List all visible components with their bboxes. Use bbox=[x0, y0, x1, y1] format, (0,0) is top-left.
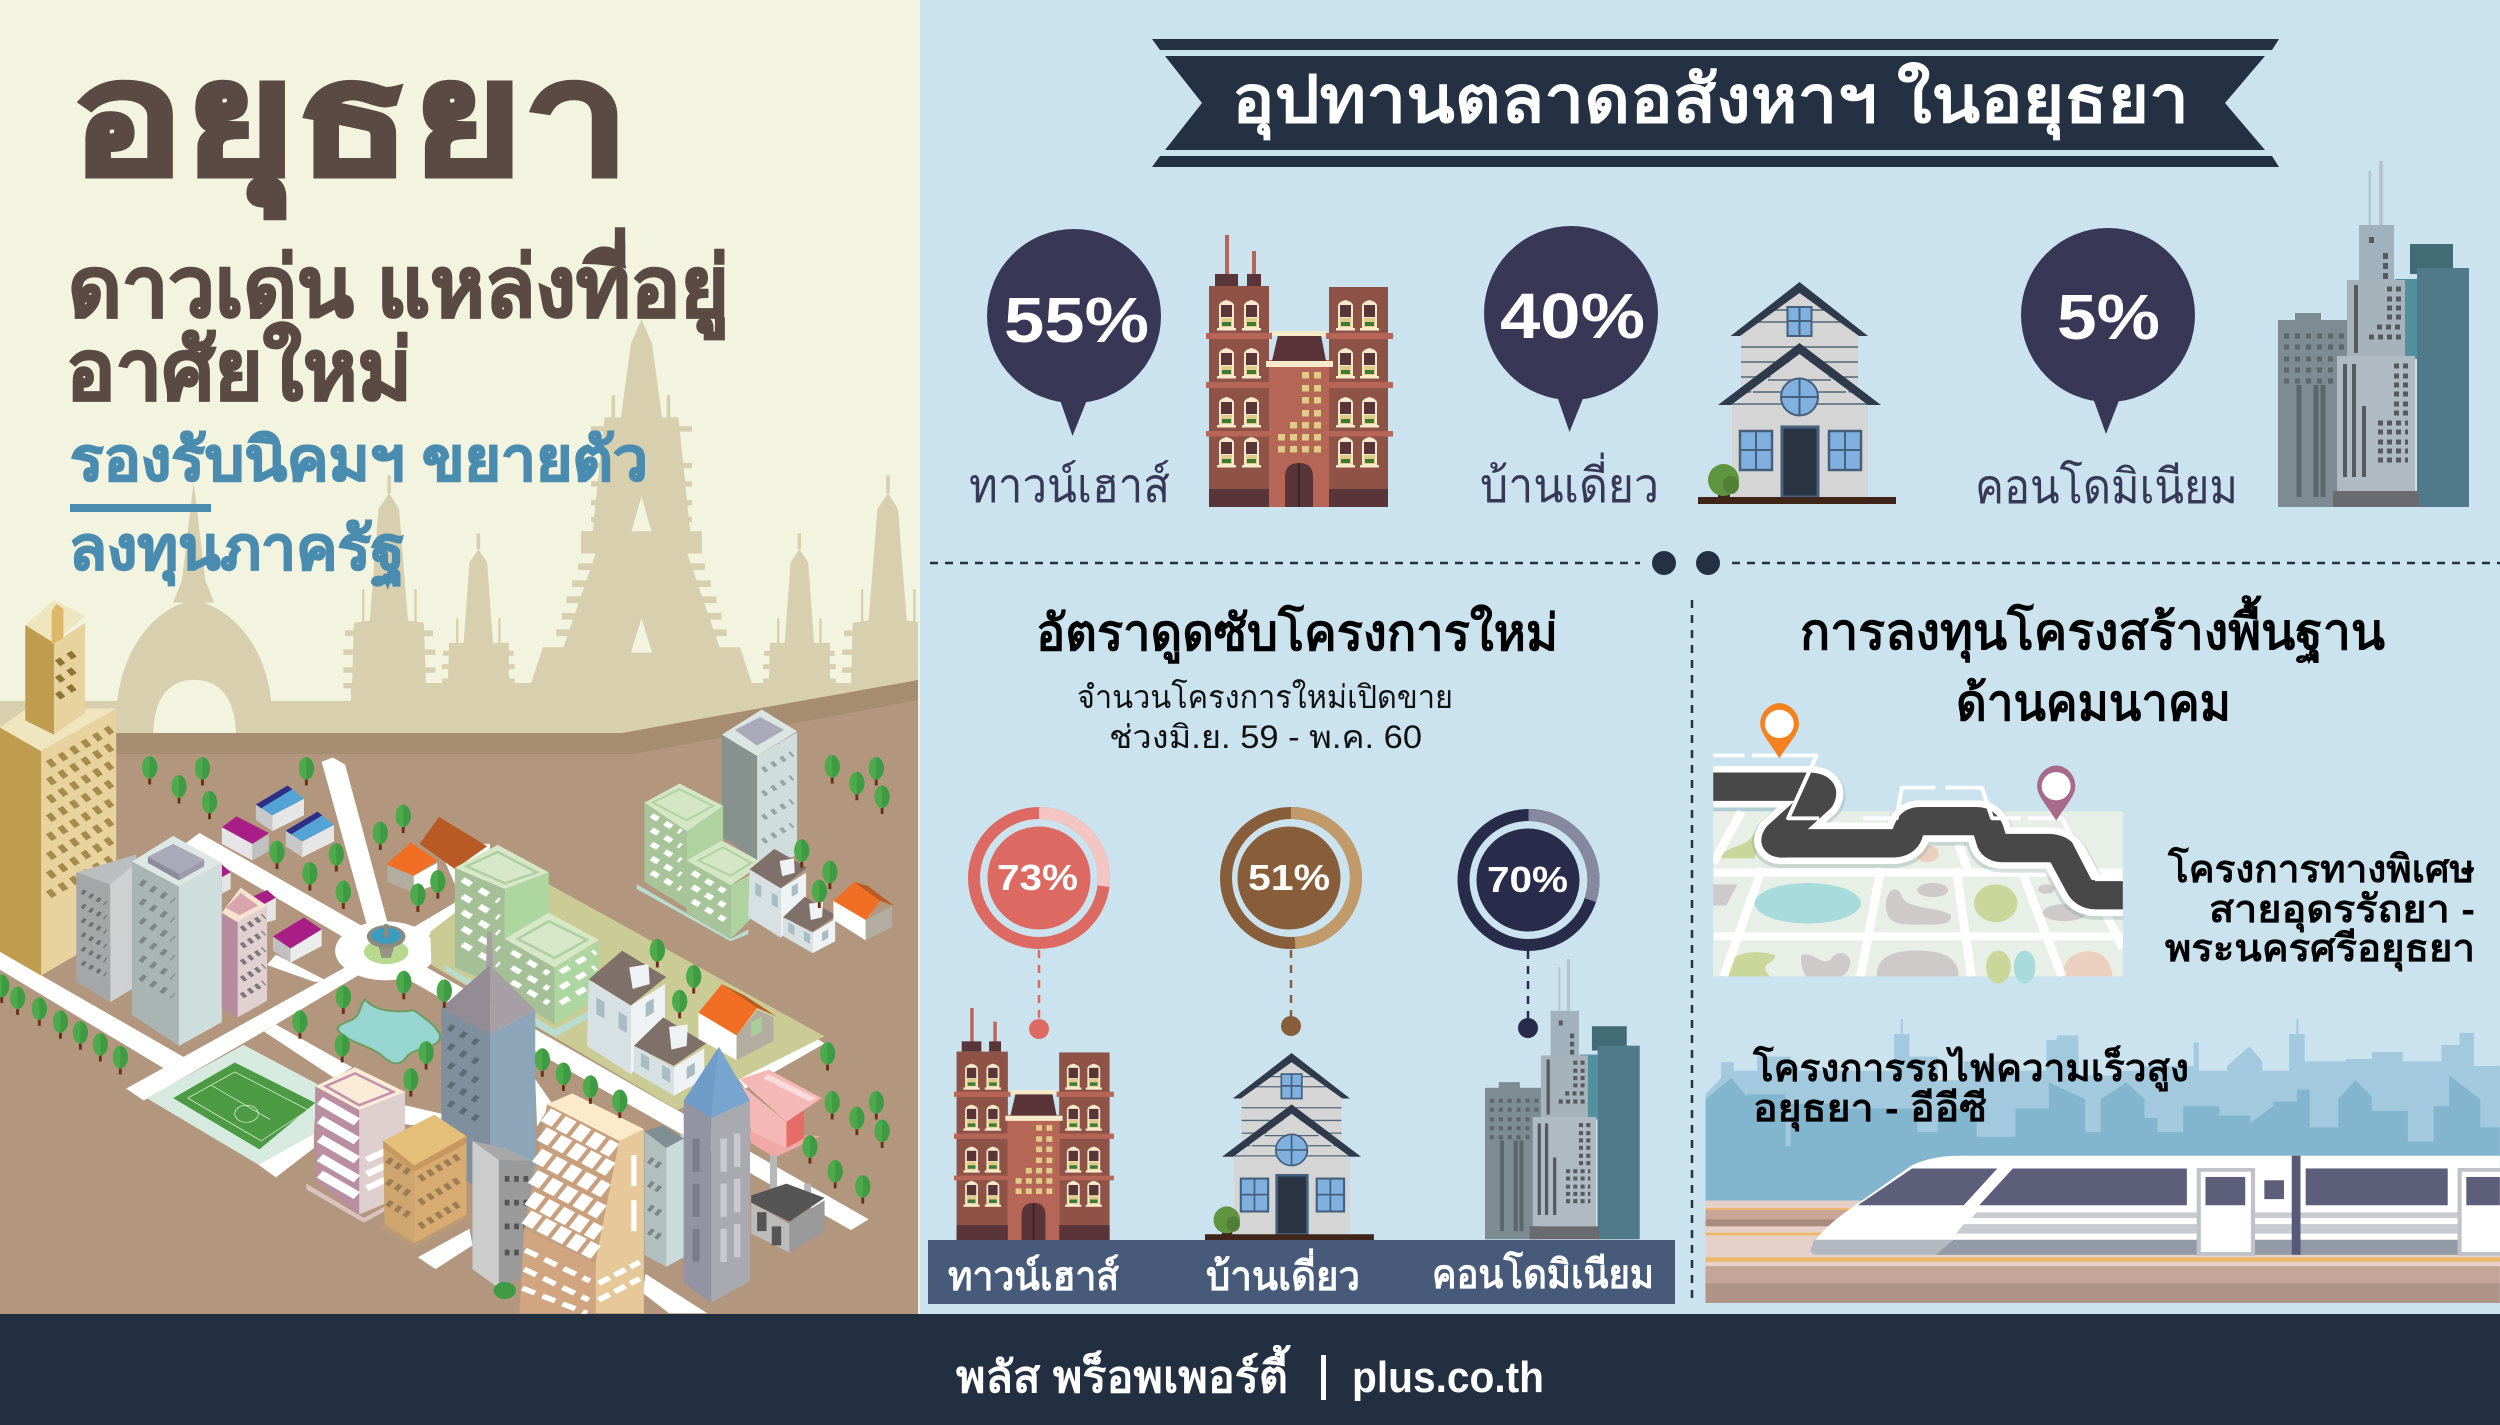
label: ทาวน์เฮาส์ bbox=[969, 460, 1170, 513]
pink apartment bbox=[306, 1067, 405, 1223]
horizontal divider with dots bbox=[930, 551, 2500, 575]
label: บ้านเดี่ยว bbox=[1480, 452, 1659, 513]
title: Ayutthaya: อยุธยา bbox=[70, 29, 630, 219]
fountain bbox=[364, 924, 408, 964]
grey tower bbox=[76, 854, 136, 1002]
city skyline back bbox=[1706, 1018, 2500, 1146]
stat: single house 40%: 40% bbox=[1500, 280, 1645, 352]
sub text bbox=[1077, 679, 1453, 755]
donut: 51% bbox=[1226, 813, 1356, 1036]
slim teal tower bbox=[644, 1125, 684, 1267]
donut: 70% bbox=[1464, 815, 1594, 1038]
text: motorway project: โครงการทางพิเศษ bbox=[2167, 846, 2475, 891]
temple skyline silhouette bbox=[0, 319, 934, 741]
category bar bbox=[928, 1240, 1675, 1304]
tagline: public investment: ลงทุนภาครัฐ bbox=[69, 515, 405, 587]
vertical divider bbox=[1691, 600, 1693, 1305]
yellow tower bbox=[0, 600, 116, 976]
pale tower bbox=[132, 836, 222, 1046]
green tower behind, right block bbox=[637, 709, 797, 941]
sub text: ช่วงมิ.ย. 59 - พ.ค. 60 bbox=[1109, 719, 1422, 755]
donut: 70%: 70% bbox=[1487, 859, 1568, 900]
sub text: จำนวนโครงการใหม่เปิดขาย bbox=[1077, 679, 1453, 715]
stat: townhouse 55% bbox=[969, 229, 1170, 513]
banner title: อุปทานตลาดอสังหาฯ ในอยุธยา bbox=[1232, 60, 2189, 141]
subtitle line 1: ดาวเด่น แหล่งที่อยู่ bbox=[68, 228, 729, 340]
houses, top right bbox=[748, 849, 836, 953]
green blocks center bbox=[445, 845, 599, 1037]
text: motorway project: สายอุดรรัถยา - bbox=[2209, 889, 2475, 933]
text: motorway project: พระนครศรีอยุธยา bbox=[2165, 928, 2475, 972]
donut: 73%: 73% bbox=[997, 857, 1078, 898]
train bbox=[1810, 1156, 2500, 1255]
panel: left background bbox=[0, 0, 920, 1425]
glass tower bbox=[519, 1093, 644, 1313]
stat: condominium 5% bbox=[1975, 228, 2238, 514]
heading: absorption rate: อัตราดูดซับโครงการใหม่ bbox=[1036, 603, 1558, 664]
ground layers bbox=[1705, 1201, 2500, 1303]
footer: พลัส พร็อพเพอร์ตี้ bbox=[956, 1344, 1292, 1402]
label: คอนโดมิเนียม bbox=[1975, 459, 2238, 514]
text: high-speed rail project: อยุธยา - อีอีซี bbox=[1753, 1088, 1987, 1132]
stat: condominium 5%: 5% bbox=[2057, 281, 2160, 353]
text: high-speed rail project: โครงการรถไฟความเร็วสูง bbox=[1752, 1045, 2189, 1092]
small roof houses bbox=[222, 785, 334, 963]
roads bbox=[0, 757, 869, 1313]
isometric city ground bbox=[0, 680, 918, 1314]
purple tower with blue spire bbox=[684, 1047, 750, 1302]
icon: townhouse bbox=[1206, 235, 1393, 507]
factory bbox=[751, 1155, 825, 1252]
trees bbox=[0, 755, 890, 1204]
icon: townhouse small bbox=[954, 1008, 1114, 1241]
panel: right background bbox=[920, 0, 2500, 1425]
heading: infrastructure investment: การลงทุนโครงสร้างพื้นฐาน bbox=[1800, 595, 2385, 664]
high-speed rail illustration bbox=[1705, 1019, 2500, 1303]
map blobs bbox=[1713, 832, 2112, 983]
icon: condo small bbox=[1485, 959, 1640, 1239]
stat: townhouse 55%: 55% bbox=[1004, 284, 1149, 356]
icon: house bbox=[1698, 282, 1896, 504]
tan building bbox=[379, 1115, 471, 1248]
icon: house small bbox=[1205, 1053, 1374, 1240]
text: high-speed rail project bbox=[1752, 1045, 2189, 1132]
olive plot bbox=[430, 884, 825, 1110]
heading: infrastructure investment bbox=[1800, 595, 2385, 731]
donut: 73% bbox=[974, 813, 1104, 1039]
text: motorway project bbox=[2165, 846, 2475, 972]
footer: plus.co.th bbox=[1352, 1353, 1544, 1402]
icon: orange pin bbox=[1760, 703, 1799, 758]
pond bbox=[338, 999, 440, 1063]
orange house center-right bbox=[698, 984, 776, 1060]
category bar: คอนโดมิเนียม bbox=[1432, 1251, 1654, 1297]
white houses center bbox=[587, 951, 706, 1096]
tagline divider bbox=[70, 504, 211, 512]
icon: condo bbox=[2278, 161, 2469, 507]
tagline: industrial estates: รองรับนิคมฯ ขยายตัว bbox=[70, 426, 648, 493]
city skyline front bbox=[1705, 1075, 2500, 1203]
footer bbox=[0, 1314, 2500, 1425]
orange house bbox=[386, 817, 490, 893]
icon: purple pin bbox=[2037, 765, 2075, 821]
pink shop bbox=[739, 1070, 822, 1157]
blue tower with spire bbox=[441, 932, 535, 1195]
donut: 51%: 51% bbox=[1248, 857, 1330, 898]
soccer field bbox=[147, 1045, 317, 1165]
heading: infrastructure investment: ด้านคมนาคม bbox=[1956, 675, 2231, 731]
subtitle line 2: อาศัยใหม่ bbox=[66, 322, 412, 417]
grey slab tower bbox=[472, 1141, 533, 1299]
stat: single house 40% bbox=[1480, 226, 1659, 513]
road map illustration bbox=[1705, 703, 2129, 983]
pink tower bbox=[222, 888, 267, 1017]
category bar: ทาวน์เฮาส์ bbox=[948, 1254, 1120, 1299]
highway bbox=[1705, 756, 2129, 897]
small orange house, right bbox=[833, 882, 894, 940]
banner bbox=[1152, 39, 2279, 167]
category bar: บ้านเดี่ยว bbox=[1206, 1248, 1360, 1299]
map streets bbox=[1713, 811, 2123, 976]
isometric city illustration bbox=[0, 600, 894, 1313]
